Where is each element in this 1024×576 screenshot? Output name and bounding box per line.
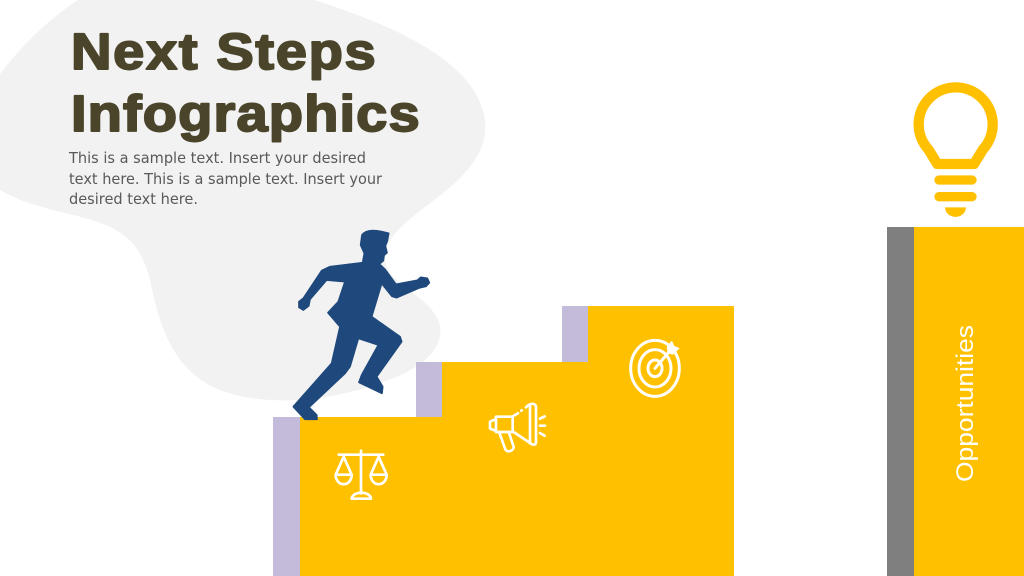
runner figure: [293, 231, 429, 419]
title: Infographics: [71, 85, 420, 142]
title: [71, 23, 420, 142]
staircase: [273, 306, 734, 576]
icon: target: [631, 340, 679, 396]
body text: desired text here.: [69, 190, 198, 208]
column: opportunities: [887, 227, 1024, 576]
icon: megaphone: [490, 404, 545, 451]
column label: Opportunities: [952, 325, 979, 482]
body text: [68, 149, 383, 208]
title: Next Steps: [71, 23, 376, 80]
icon: scales: [336, 451, 387, 499]
background blob: [0, 0, 485, 400]
body text: This is a sample text. Insert your desired: [68, 149, 366, 167]
icon: light bulb: [919, 87, 993, 217]
body text: text here. This is a sample text. Insert your: [69, 170, 383, 188]
